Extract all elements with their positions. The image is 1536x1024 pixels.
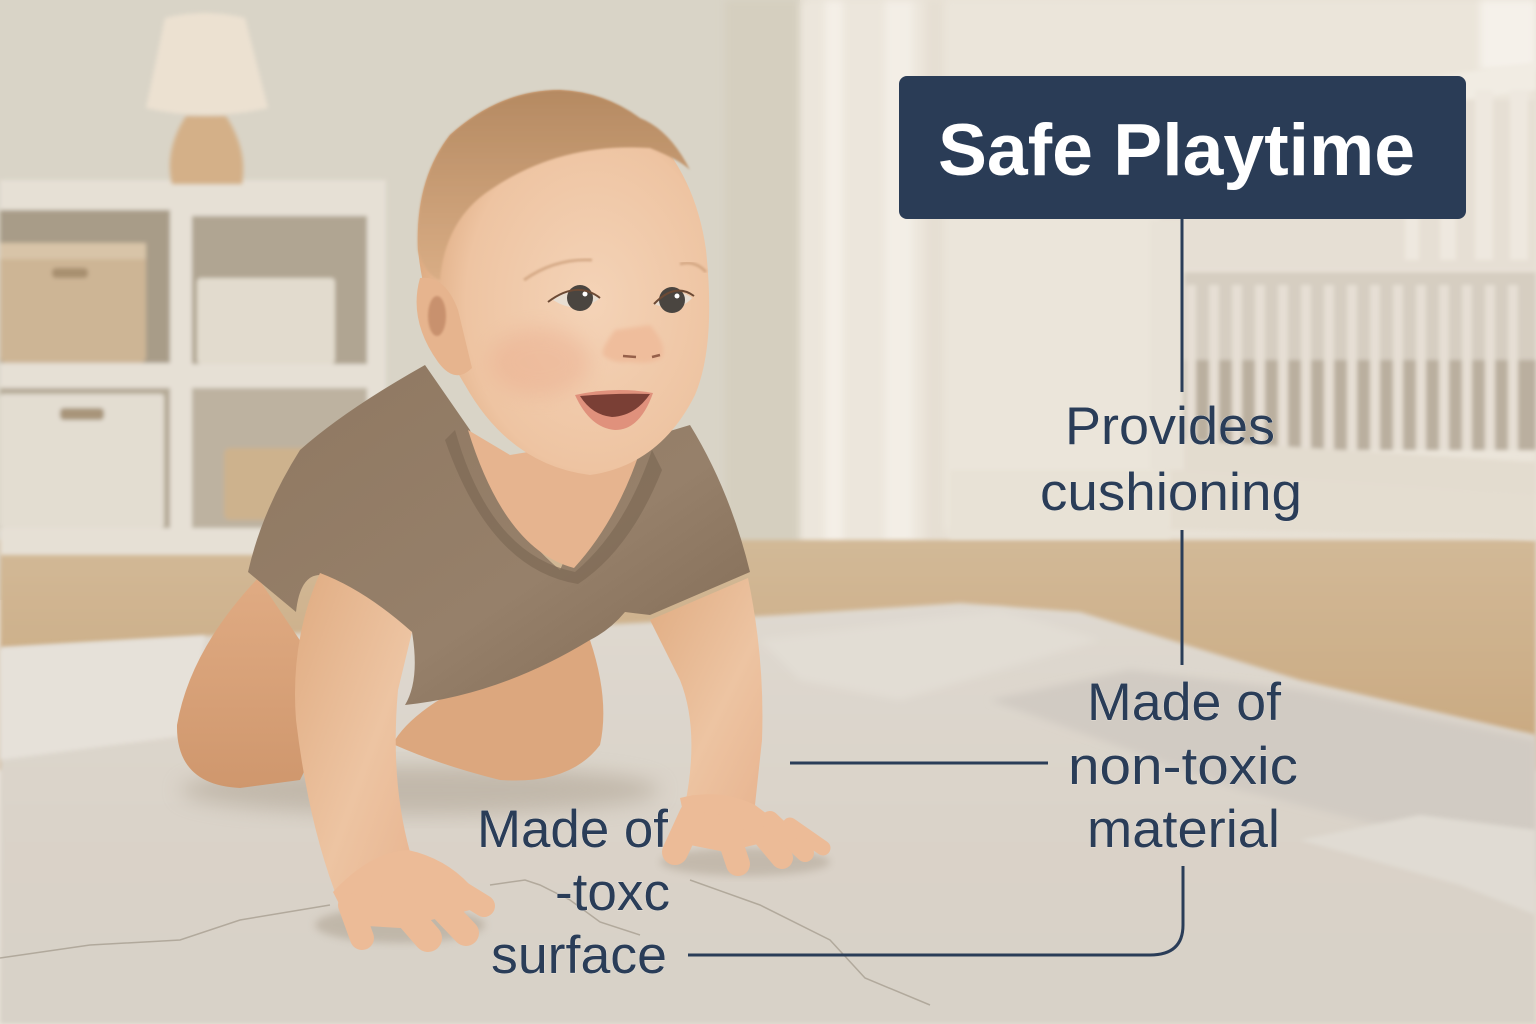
basket: [0, 243, 146, 363]
bodysuit: [248, 365, 750, 705]
small basket: [224, 448, 316, 520]
back thigh: [177, 578, 340, 788]
label: made of non-toxic material: non-toxic: [1068, 737, 1298, 796]
left ear: [417, 278, 472, 375]
right arm: [650, 578, 762, 805]
title box: [899, 76, 1466, 219]
skirting: [950, 470, 1170, 538]
hair: [418, 90, 690, 280]
right wall: [945, 0, 1536, 530]
mat seams: [0, 880, 930, 1005]
label: provides cushioning: cushioning: [1040, 463, 1302, 522]
bodysuit neckline: [445, 430, 662, 584]
label: made of -toxc surface: [477, 800, 670, 985]
connector lines: [688, 219, 1183, 955]
shelf unit: [0, 180, 386, 555]
white box: [197, 278, 335, 364]
label: made of -toxc surface: surface: [491, 926, 667, 985]
left hand: [333, 850, 484, 938]
crib: [1150, 62, 1536, 540]
wall left: [0, 0, 800, 600]
label: made of -toxc surface: -toxc: [555, 863, 670, 922]
shadow under baby: [180, 766, 660, 814]
mat lighter tile: [0, 636, 205, 760]
wall corner shade: [725, 0, 805, 560]
mat right tile: [990, 670, 1536, 880]
eyebrows: [524, 260, 592, 280]
head: [418, 90, 709, 475]
far knee: [395, 640, 603, 781]
white box lower: [0, 394, 164, 528]
nose: [602, 325, 664, 363]
title text: Safe Playtime: [938, 110, 1415, 191]
baby: [177, 90, 830, 943]
mouth: [575, 390, 653, 430]
label: made of non-toxic material: [1068, 673, 1298, 859]
label: provides cushioning: Provides: [1065, 397, 1275, 456]
window glow: [1480, 0, 1536, 70]
cheeks: [490, 328, 590, 396]
left arm: [295, 573, 412, 892]
label: made of non-toxic material: material: [1087, 800, 1280, 859]
label: provides cushioning: [1040, 397, 1302, 522]
label: made of -toxc surface: Made of: [477, 800, 668, 859]
lamp: [146, 13, 268, 184]
label: made of non-toxic material: Made of: [1087, 673, 1281, 732]
eyes: [548, 285, 600, 311]
floor: [0, 540, 1536, 770]
right hand: [675, 794, 823, 864]
chest skin: [468, 430, 642, 568]
curtain: [800, 0, 945, 545]
foam play mat: [0, 603, 1536, 1024]
